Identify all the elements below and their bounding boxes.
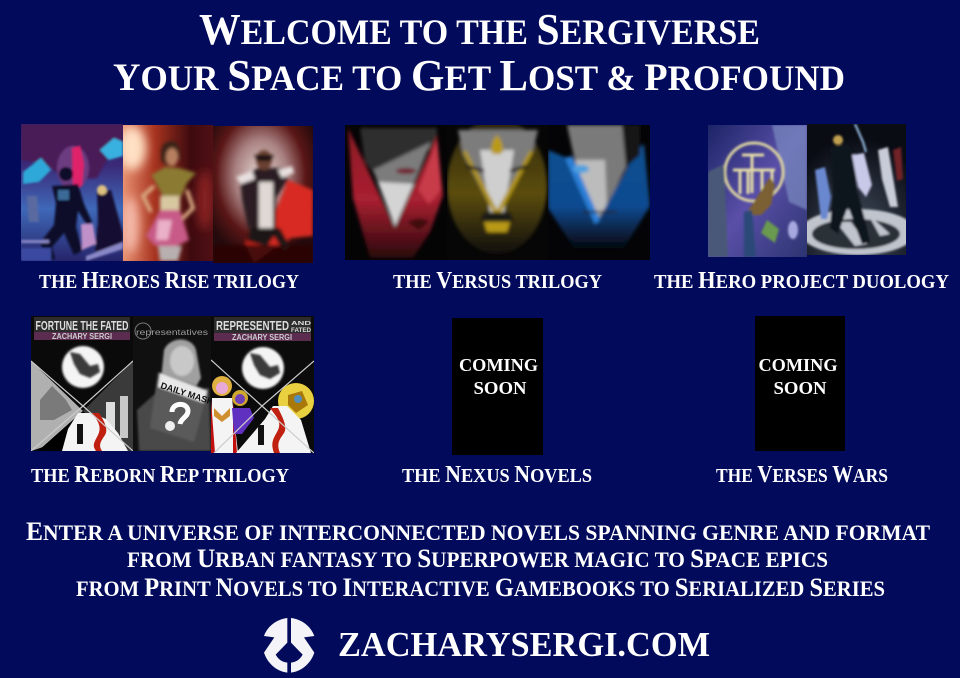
panel: Reborn Rep covers	[31, 316, 314, 453]
website URL: ZACHARYSERGI.COM	[338, 625, 710, 664]
label: Verses Wars: THE VERSES WARS	[716, 462, 888, 488]
cover: Heroes Rise book two	[118, 125, 213, 261]
panel: Versus covers	[345, 118, 650, 260]
description text block: ENTER A UNIVERSE OF INTERCONNECTED NOVELS SPANNING GENRE AND FORMAT	[26, 517, 930, 546]
cover: Representatives: DAILY MASK	[159, 380, 215, 407]
cover: Versus blue	[548, 125, 650, 260]
cover: Representatives	[133, 316, 215, 451]
cover: Hero Project two	[807, 124, 906, 255]
placeholder: Verses Wars coming soon: SOON	[774, 378, 826, 398]
cover: Versus red	[345, 125, 447, 260]
label: Heroes Rise: THE HEROES RISE TRILOGY	[39, 268, 299, 294]
cover: Fortune the Fated	[31, 316, 133, 451]
label: Hero Project: THE HERO PROJECT DUOLOGY	[654, 268, 950, 294]
placeholder: Nexus Novels coming soon: COMING	[459, 355, 538, 375]
title: WELCOME TO THE SERGIVERSE	[199, 5, 760, 54]
label: Versus: THE VERSUS TRILOGY	[393, 268, 603, 294]
cover: Represented and Fated: AND	[291, 321, 312, 327]
placeholder: Nexus Novels coming soon: SOON	[474, 378, 526, 398]
label: Reborn Rep: THE REBORN REP TRILOGY	[31, 462, 290, 488]
description text block: FROM PRINT NOVELS TO INTERACTIVE GAMEBOOKS TO SERIALIZED SERIES	[76, 573, 885, 602]
cover: Represented and Fated: ZACHARY SERGI	[232, 333, 292, 342]
label: Nexus Novels: THE NEXUS NOVELS	[402, 462, 592, 488]
cover: Heroes Rise book three	[213, 126, 313, 263]
cover: Hero Project one	[708, 125, 807, 257]
placeholder: Verses Wars coming soon: COMING	[758, 355, 838, 375]
cover: Represented and Fated: FATED	[291, 328, 312, 334]
cover: Fortune the Fated: ZACHARY SERGI	[52, 332, 112, 341]
title	[113, 5, 845, 100]
placeholder: Verses Wars coming soon	[755, 316, 845, 451]
cover: Representatives: representatives	[136, 328, 208, 337]
cover: Represented and Fated: REPRESENTED	[216, 319, 289, 333]
title: YOUR SPACE TO GET LOST & PROFOUND	[113, 51, 845, 100]
panel: Heroes Rise covers	[21, 124, 313, 263]
cover: Fortune the Fated: FORTUNE THE FATED	[36, 319, 128, 333]
placeholder: Nexus Novels coming soon	[452, 318, 543, 455]
description text block	[26, 517, 930, 602]
description text block: FROM URBAN FANTASY TO SUPERPOWER MAGIC TO SPACE EPICS	[127, 544, 828, 573]
cover: Represented and Fated	[211, 316, 314, 453]
panel: Hero Project covers	[708, 124, 916, 257]
cover: Versus gold	[447, 118, 548, 260]
icon: ZS logo	[264, 618, 314, 673]
cover: Heroes Rise book one	[21, 124, 123, 261]
